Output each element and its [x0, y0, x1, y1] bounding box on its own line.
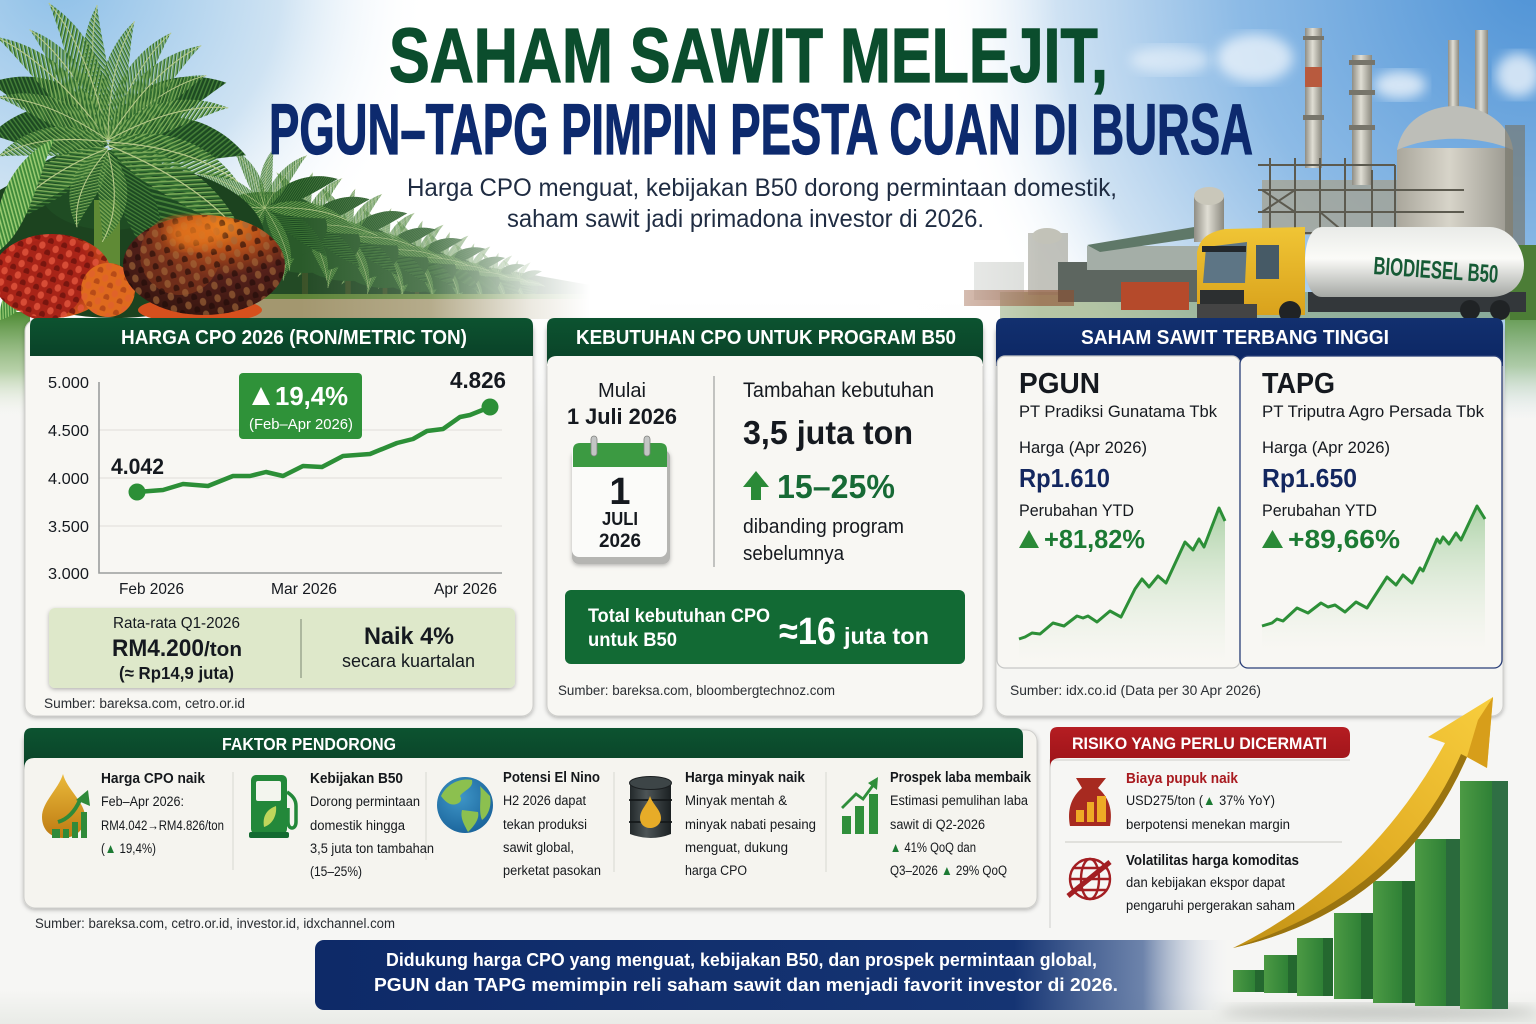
- additional need: 3,5 juta ton: dibanding program: [743, 516, 904, 538]
- icon: crossed globe: [1068, 859, 1110, 899]
- callout: 19,4%: 19,4%: [275, 381, 348, 411]
- total need bar: [565, 590, 965, 664]
- risk: biaya pupuk: berpotensi menekan margin: [1126, 817, 1290, 832]
- line chart: CPO price: 4.500: [48, 423, 89, 440]
- icon: fertilizer bag: [1069, 778, 1111, 826]
- start date: Mulai: [598, 380, 646, 402]
- card: TAPG: Perubahan YTD: [1262, 501, 1377, 520]
- panel: faktor pendorong: [24, 728, 1037, 908]
- card: TAPG: Harga (Apr 2026): [1262, 438, 1390, 457]
- total need bar: Total kebutuhan CPO: [588, 606, 770, 627]
- arrow: rising gold arrow: [1233, 697, 1493, 948]
- callout: 19,4%: [239, 373, 362, 439]
- additional need: 3,5 juta ton: Tambahan kebutuhan: [743, 379, 934, 402]
- panel heading: harga CPO: [30, 318, 533, 356]
- card: TAPG: Rp1.650: [1262, 463, 1357, 493]
- factor: prospek laba: Prospek laba membaik: [890, 770, 1032, 786]
- summary box: Q1 average: (≈ Rp14,9 juta): [119, 663, 234, 683]
- line chart: CPO price: [48, 367, 506, 598]
- bottom banner: [315, 940, 1235, 1010]
- card: TAPG: +89,66%: [1288, 524, 1400, 554]
- line chart: CPO price: 4.000: [48, 471, 89, 488]
- sparkline: PGUN: [1019, 508, 1225, 662]
- source: Sumber: idx.co.id (Data per 30 Apr 2026): [1010, 683, 1261, 698]
- card: TAPG: [1240, 356, 1502, 668]
- panel heading: faktor pendorong: [24, 728, 1023, 770]
- panel: kebutuhan CPO B50: [547, 318, 983, 716]
- summary box: Q1 average: RM4.200: [112, 635, 204, 662]
- risk: biaya pupuk: USD275/ton (▲ 37% YoY): [1126, 793, 1275, 808]
- icon: globe: [437, 777, 493, 833]
- risk: volatilitas harga: Volatilitas harga komoditas: [1126, 853, 1299, 869]
- line chart: CPO price: 4.042: [111, 454, 164, 479]
- factor: prospek laba: ▲ 41% QoQ dan: [890, 840, 976, 855]
- source: faktor pendorong: Sumber: bareksa.com, cetro.or.id, investor.id, idxchannel.com: [35, 916, 395, 931]
- icon: calendar: 2026: [599, 531, 641, 552]
- summary box: Q1 average: /ton: [204, 639, 242, 661]
- factor: prospek laba: [842, 770, 1032, 878]
- factor: harga minyak naik: Minyak mentah &: [685, 793, 787, 808]
- factor: harga CPO naik: (▲ 19,4%): [101, 841, 156, 856]
- card: TAPG: PT Triputra Agro Persada Tbk: [1262, 402, 1484, 421]
- risk: volatilitas harga: pengaruhi pergerakan saham: [1126, 898, 1295, 913]
- factor: harga CPO naik: Harga CPO naik: [101, 771, 206, 787]
- panel heading: faktor pendorong: FAKTOR PENDORONG: [222, 734, 396, 754]
- factor: potensi El Nino: H2 2026 dapat: [503, 793, 586, 808]
- card: PGUN: PT Pradiksi Gunatama Tbk: [1019, 402, 1217, 421]
- factor: potensi El Nino: Potensi El Nino: [503, 770, 600, 786]
- panel heading: kebutuhan CPO: KEBUTUHAN CPO UNTUK PROGRAM B50: [576, 327, 956, 349]
- title: [269, 13, 1253, 170]
- factor: kebijakan B50: domestik hingga: [310, 818, 405, 833]
- summary box: Q1 average: Rata-rata Q1-2026: [113, 615, 240, 632]
- line chart: CPO price: Apr 2026: [434, 581, 497, 598]
- line chart: CPO price: 4.826: [450, 367, 506, 393]
- factor: kebijakan B50: (15–25%): [310, 864, 362, 879]
- panel: saham sawit: [996, 318, 1503, 716]
- summary box: Q1 average: Naik 4%: [364, 623, 454, 650]
- factor: kebijakan B50: Dorong permintaan: [310, 794, 420, 809]
- start date: 1 Juli 2026: [567, 404, 677, 429]
- line chart: CPO price: Feb 2026: [119, 581, 184, 598]
- panel heading: risiko: RISIKO YANG PERLU DICERMATI: [1072, 735, 1327, 753]
- callout: 19,4%: (Feb–Apr 2026): [249, 416, 353, 433]
- title: SAHAM SAWIT MELEJIT,: [389, 13, 1108, 99]
- panel heading: saham sawit: SAHAM SAWIT TERBANG TINGGI: [1081, 327, 1389, 349]
- factor: harga CPO naik: RM4.042→RM4.826/ton: [101, 818, 224, 833]
- line chart: CPO price: Mar 2026: [271, 581, 337, 598]
- risk: biaya pupuk: [1069, 771, 1290, 832]
- panel heading: harga CPO: HARGA CPO 2026 (RON/METRIC TON): [121, 327, 467, 349]
- factor: harga minyak naik: menguat, dukung: [685, 840, 788, 855]
- card: PGUN: [997, 356, 1240, 668]
- sparkline: TAPG: [1262, 506, 1485, 650]
- panel heading: kebutuhan CPO: [547, 318, 983, 366]
- card: TAPG: TAPG: [1262, 368, 1335, 400]
- line chart: CPO price: 5.000: [48, 375, 89, 392]
- panel heading: saham sawit: [996, 318, 1503, 366]
- icon: fuel pump: [249, 775, 296, 838]
- factor: harga CPO naik: Feb–Apr 2026:: [101, 794, 184, 809]
- factor: potensi El Nino: sawit global,: [503, 840, 574, 855]
- factor: prospek laba: Estimasi pemulihan laba: [890, 793, 1028, 808]
- icon: calendar: [572, 436, 670, 564]
- total need bar: juta ton: [843, 623, 929, 649]
- panel: harga CPO: [25, 318, 533, 716]
- additional need: 3,5 juta ton: 3,5 juta ton: [743, 414, 913, 451]
- line chart: CPO price: 3.000: [48, 566, 89, 583]
- icon: calendar: 1: [609, 471, 631, 513]
- factor: prospek laba: Q3–2026 ▲ 29% QoQ: [890, 863, 1007, 878]
- card: PGUN: +81,82%: [1044, 524, 1145, 554]
- panel: risiko: [1050, 727, 1350, 928]
- card: PGUN: Perubahan YTD: [1019, 501, 1134, 520]
- photo: oil palm plantation: [0, 0, 1536, 420]
- factor: potensi El Nino: perketat pasokan: [503, 863, 601, 878]
- factor: harga minyak naik: Harga minyak naik: [685, 770, 806, 786]
- risk: volatilitas harga: dan kebijakan ekspor dapat: [1126, 875, 1285, 890]
- risk: volatilitas harga: [1068, 853, 1299, 913]
- icon: calendar: JULI: [602, 509, 638, 529]
- start date: [567, 380, 677, 429]
- factor: potensi El Nino: tekan produksi: [503, 817, 587, 832]
- summary box: Q1 average: secara kuartalan: [342, 651, 475, 671]
- risk: biaya pupuk: Biaya pupuk naik: [1126, 771, 1239, 787]
- card: PGUN: PGUN: [1019, 368, 1100, 400]
- additional need: 3,5 juta ton: sebelumnya: [743, 543, 845, 565]
- source: Sumber: bareksa.com, cetro.or.id: [44, 696, 245, 711]
- icon: oil drop with growth bars: [42, 774, 90, 838]
- bar chart: rising green bars: [1220, 781, 1536, 1020]
- subtitle: saham sawit jadi primadona investor di 2026.: [507, 205, 984, 233]
- card: PGUN: Rp1.610: [1019, 463, 1110, 493]
- icon: oil barrel: [629, 776, 672, 838]
- subtitle: Harga CPO menguat, kebijakan B50 dorong permintaan domestik,: [407, 174, 1117, 202]
- source: Sumber: bareksa.com, bloombergtechnoz.com: [558, 683, 835, 698]
- subtitle: [407, 174, 1117, 233]
- factor: harga minyak naik: minyak nabati pesaing: [685, 817, 816, 832]
- total need bar: ≈16: [779, 611, 836, 653]
- factor: potensi El Nino: [437, 770, 601, 878]
- icon: rising bar chart: [842, 777, 878, 834]
- panel heading: risiko: [1050, 727, 1350, 768]
- additional need: 3,5 juta ton: [743, 379, 934, 565]
- factor: harga CPO naik: [42, 771, 224, 856]
- card: PGUN: Harga (Apr 2026): [1019, 438, 1147, 457]
- factor: kebijakan B50: [249, 771, 434, 879]
- factor: kebijakan B50: 3,5 juta ton tambahan: [310, 841, 434, 856]
- factor: prospek laba: sawit di Q2-2026: [890, 817, 985, 832]
- factor: kebijakan B50: Kebijakan B50: [310, 771, 403, 787]
- bottom banner: Didukung harga CPO yang menguat, kebijakan B50, dan prospek permintaan global,: [386, 949, 1097, 970]
- icon: up arrow: [743, 471, 769, 500]
- bottom banner: PGUN dan TAPG memimpin reli saham sawit dan menjadi favorit investor di 2026.: [374, 974, 1118, 995]
- factor: harga minyak naik: [629, 770, 816, 878]
- line chart: CPO price: 3.500: [48, 519, 89, 536]
- factor: harga minyak naik: harga CPO: [685, 863, 747, 878]
- total need bar: untuk B50: [588, 630, 677, 651]
- summary box: Q1 average: [49, 608, 515, 688]
- additional need: 3,5 juta ton: 15–25%: [777, 468, 895, 505]
- photo: biodiesel refinery and tanker truck: [964, 28, 1536, 323]
